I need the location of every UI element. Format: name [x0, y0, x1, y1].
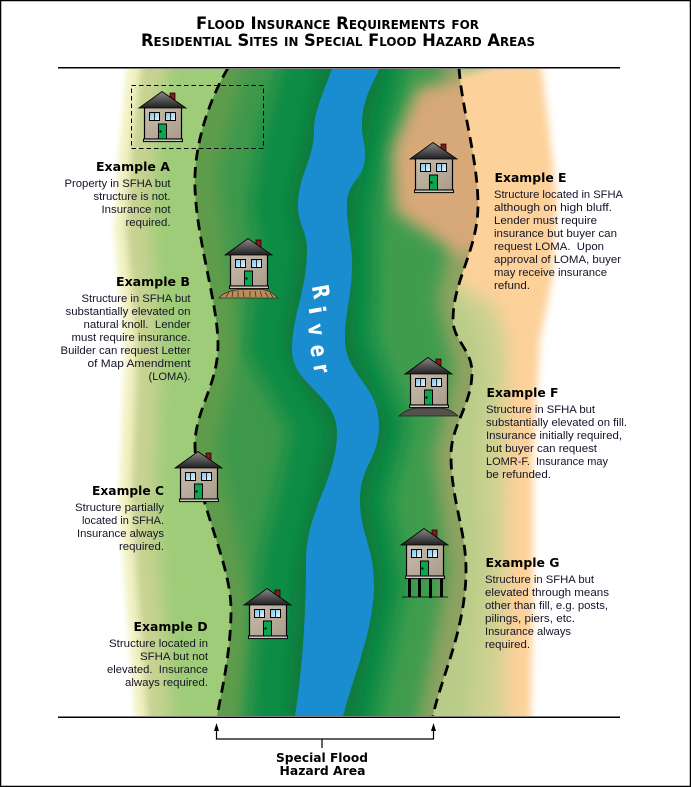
- text: example F: be refunded.: [486, 469, 551, 481]
- left olive band: [122, 69, 178, 716]
- right yellow-green ground: [433, 288, 493, 716]
- left light green ground: [144, 69, 231, 716]
- example A property outline: [132, 86, 264, 148]
- house B on knoll: [219, 238, 278, 298]
- right tan-green ground: [454, 280, 514, 716]
- text: example B: substantially elevated on: [66, 306, 190, 318]
- SFHA label: Hazard Area: [280, 763, 366, 778]
- river label: r: [308, 362, 336, 376]
- text: example G: Example G: [486, 555, 560, 570]
- text: example E: Example E: [494, 170, 566, 185]
- text: example C: [75, 483, 164, 553]
- text: example G: Insurance always: [485, 626, 571, 638]
- text: example C: located in SFHA.: [82, 515, 164, 527]
- text: example E: refund.: [494, 280, 530, 292]
- SFHA bracket with arrows: [214, 723, 436, 748]
- text: example F: but buyer can request: [486, 443, 598, 455]
- text: example A: Example A: [96, 159, 170, 174]
- text: example B: natural knoll. Lender: [84, 319, 191, 331]
- text: example A: [64, 159, 171, 229]
- text: example F: [486, 385, 627, 481]
- text: example A: required.: [126, 217, 170, 229]
- river: [292, 68, 380, 716]
- text: example F: Example F: [486, 385, 558, 400]
- text: example E: Structure located in SFHA: [494, 189, 624, 201]
- text: example E: Lender must require: [494, 215, 597, 227]
- top-right green strip: [460, 69, 497, 80]
- text: example F: Structure in SFHA but: [486, 404, 596, 416]
- SFHA label: [276, 750, 368, 778]
- text: example G: Structure in SFHA but: [485, 574, 595, 586]
- text: example E: insurance but buyer can: [494, 228, 617, 240]
- text: example D: Example D: [134, 619, 208, 634]
- river label: i: [302, 304, 329, 316]
- house C: [175, 452, 222, 502]
- text: example D: [107, 619, 209, 689]
- house D: [244, 588, 291, 639]
- text: example F: substantially elevated on fill.: [486, 417, 627, 429]
- left cream fringe: [111, 69, 151, 716]
- house G on posts: [401, 528, 448, 598]
- text: example B: must require insurance.: [72, 332, 190, 344]
- SFHA label: Special Flood: [276, 750, 368, 765]
- river label: [302, 283, 336, 376]
- text: example B: Example B: [116, 274, 190, 289]
- bottom rule: [58, 716, 620, 718]
- text: example D: always required.: [125, 677, 208, 689]
- text: example G: elevated through means: [485, 587, 609, 599]
- right orange ground: [457, 69, 562, 716]
- river label: e: [304, 342, 333, 359]
- text: example E: although on high bluff.: [494, 202, 612, 214]
- text: example B: Builder can request Letter: [60, 345, 191, 357]
- text: example C: required.: [119, 541, 164, 553]
- text: example G: required.: [485, 639, 530, 651]
- text: example G: other than fill, e.g. posts,: [485, 600, 608, 612]
- right SFHA zone: [345, 69, 478, 716]
- text: example C: Example C: [92, 483, 164, 498]
- left SFHA zone: [194, 69, 337, 716]
- text: example F: Insurance initially required,: [486, 430, 622, 442]
- text: example D: Structure located in: [109, 638, 208, 650]
- house F on fill: [399, 358, 458, 416]
- text: example B: Structure in SFHA but: [82, 293, 191, 305]
- title: [141, 14, 535, 50]
- text: example C: Insurance always: [77, 528, 164, 540]
- text: example B: (LOMA).: [148, 371, 190, 383]
- house E on bluff: [410, 142, 457, 193]
- text: example E: approval of LOMA, buyer: [494, 254, 621, 266]
- text: example A: Insurance not: [102, 204, 171, 216]
- text: example C: Structure partially: [75, 502, 164, 514]
- text: example A: Property in SFHA but: [64, 178, 171, 190]
- text: example B: of Map Amendment: [88, 358, 191, 370]
- river label: v: [302, 322, 331, 338]
- text: example E: [494, 170, 624, 292]
- text: example F: LOMR-F. Insurance may: [486, 456, 608, 468]
- floodplain landscape: [114, 40, 557, 740]
- text: example E: may receive insurance: [494, 267, 607, 279]
- text: example A: structure is not.: [94, 191, 170, 203]
- river label: R: [306, 283, 335, 301]
- right SFHA boundary dashed: [433, 68, 478, 716]
- title: Residential Sites in Special Flood Hazard Areas: [141, 31, 535, 50]
- title: Flood Insurance Requirements for: [196, 14, 479, 33]
- text: example D: SFHA but not: [140, 651, 209, 663]
- top rule: [58, 67, 620, 68]
- text: example D: elevated. Insurance: [107, 664, 208, 676]
- text: example B: [60, 274, 191, 383]
- text: example E: request LOMA. Upon: [494, 241, 604, 253]
- house A: [139, 92, 186, 142]
- left SFHA boundary dashed: [195, 68, 231, 716]
- high bluff: [392, 78, 500, 258]
- text: example G: [485, 555, 609, 651]
- text: example G: pilings, piers, etc.: [485, 613, 575, 625]
